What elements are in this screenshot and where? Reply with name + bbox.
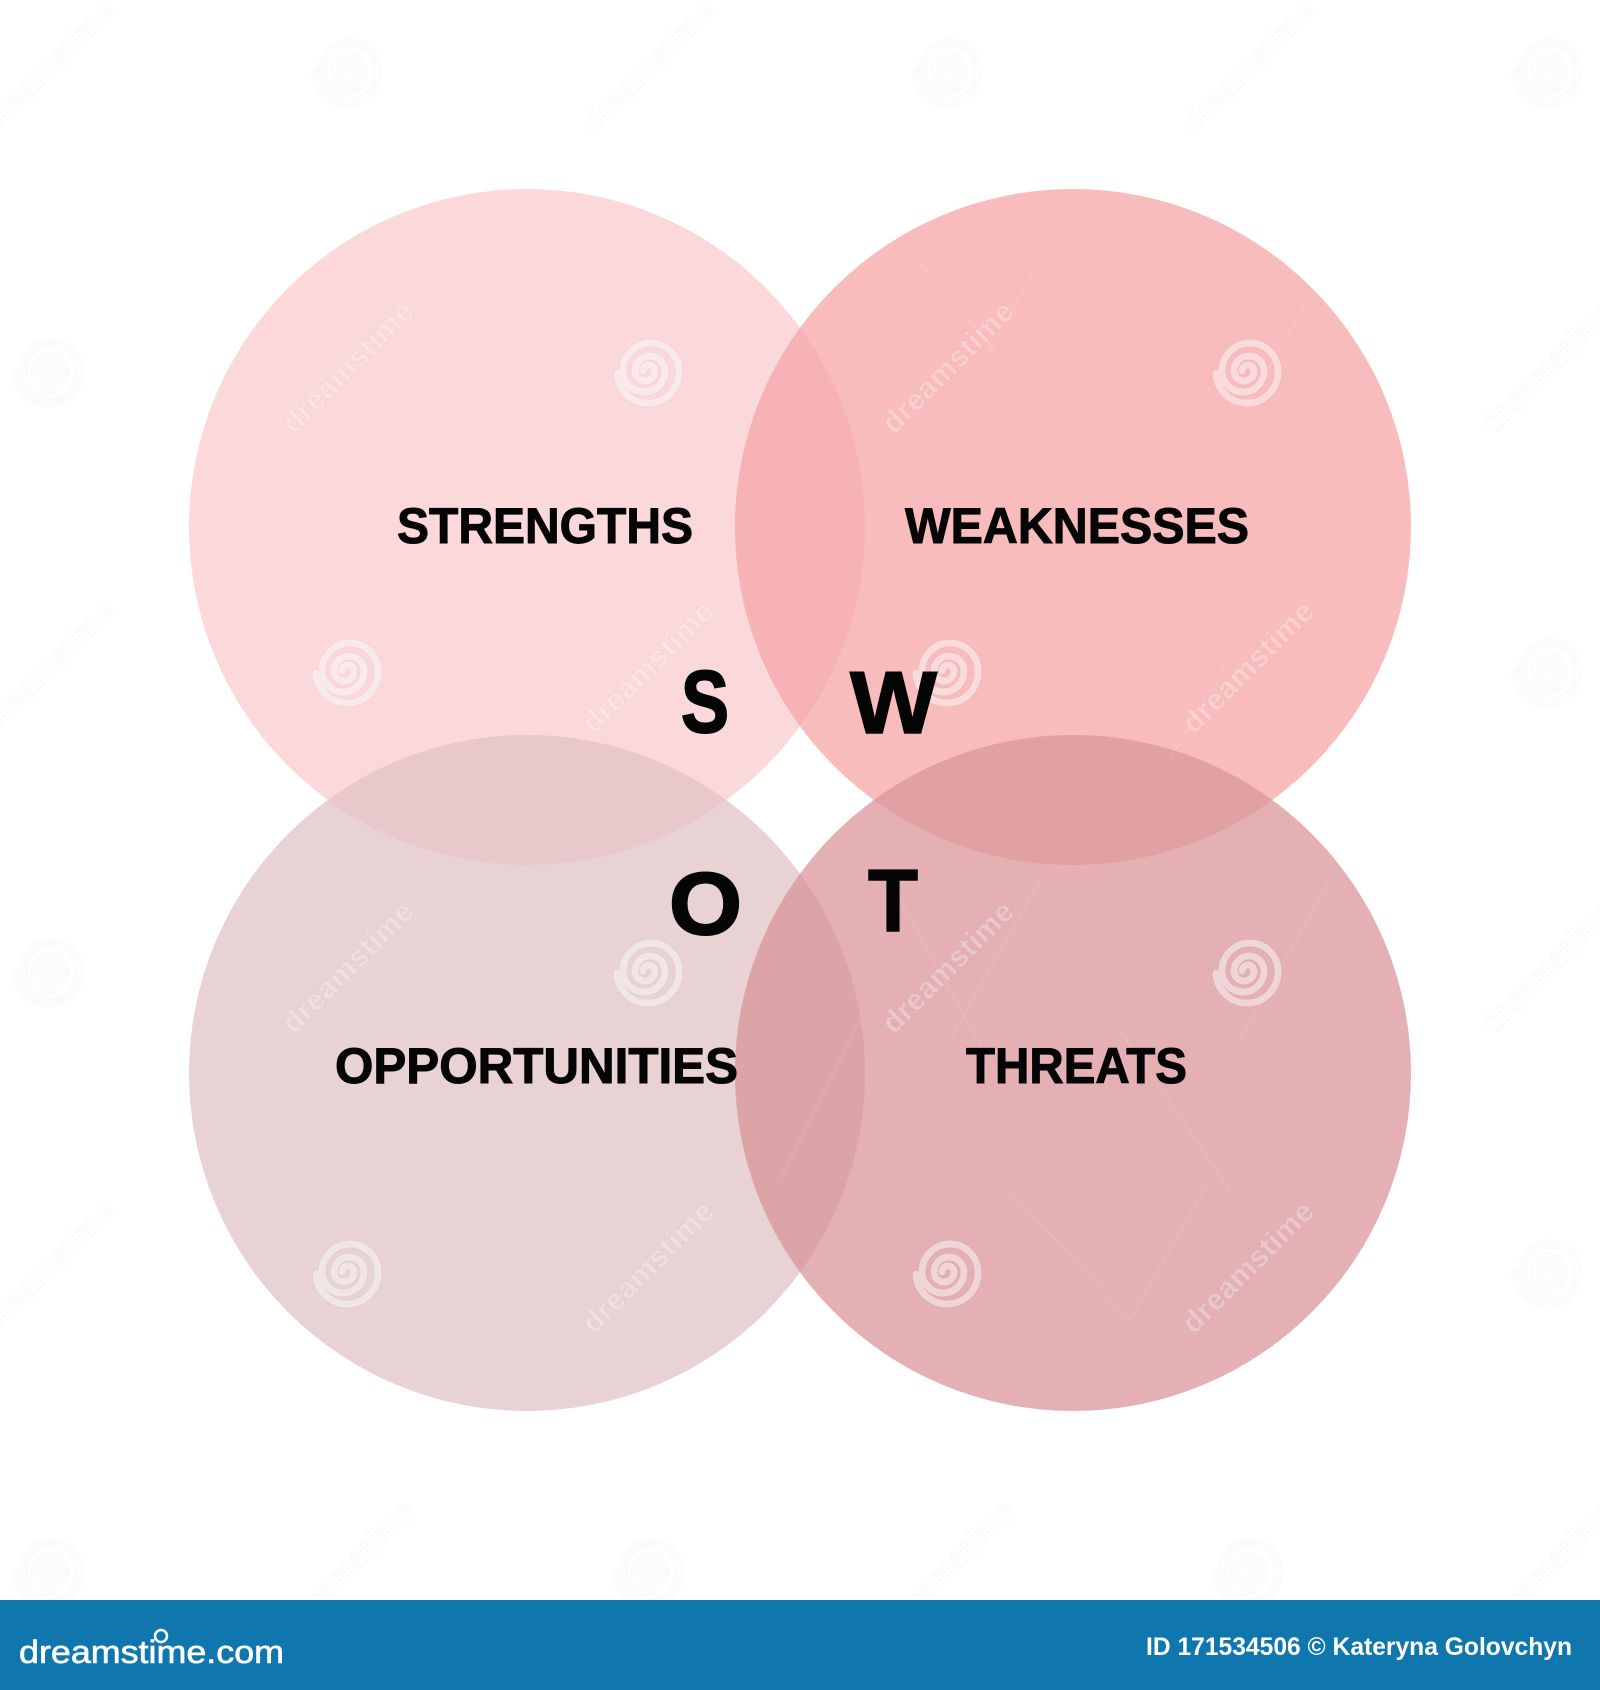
circle: weaknesses: [735, 189, 1411, 865]
watermark hairlines: [290, 240, 1330, 1340]
overlap: strengths and weaknesses: [735, 328, 865, 726]
watermark: dreamstime text: dreamstime: [576, 1195, 721, 1340]
watermark: dreamstime text: dreamstime: [876, 295, 1021, 440]
label: opportunities: OPPORTUNITIES: [335, 1038, 738, 1094]
venn diagram: [189, 189, 1411, 1411]
label: weaknesses: WEAKNESSES: [905, 498, 1249, 554]
circle: opportunities: [189, 735, 865, 1411]
label: strengths: STRENGTHS: [397, 498, 693, 554]
circle: threats: [735, 735, 1411, 1411]
letter W: W: [850, 653, 937, 752]
overlap: opportunities and threats: [735, 874, 865, 1272]
overlap: weaknesses and threats: [874, 735, 1272, 865]
watermark: dreamstime text: dreamstime: [876, 895, 1021, 1040]
watermark: dreamstime text: dreamstime: [276, 1495, 421, 1640]
footer credit: ID 171534506 © Kateryna Golovchyn: [1146, 1633, 1572, 1661]
overlap: strengths and opportunities: [328, 735, 726, 865]
letter S: S: [681, 652, 729, 751]
letter O: O: [669, 854, 742, 953]
watermark: dreamstime text: dreamstime: [876, 1495, 1021, 1640]
watermark: dreamstime text: dreamstime: [1176, 595, 1321, 740]
watermark: dreamstime text: dreamstime: [1176, 1195, 1321, 1340]
watermark: dreamstime text: dreamstime: [276, 895, 421, 1040]
footer logo: dreamstime.com: [19, 1634, 284, 1670]
footer banner: [0, 1600, 1600, 1690]
circle: strengths: [189, 189, 865, 865]
letter T: T: [868, 851, 918, 950]
watermark: dreamstime text: dreamstime: [576, 595, 721, 740]
label: threats: THREATS: [966, 1038, 1187, 1094]
watermark: dreamstime text: dreamstime: [276, 295, 421, 440]
